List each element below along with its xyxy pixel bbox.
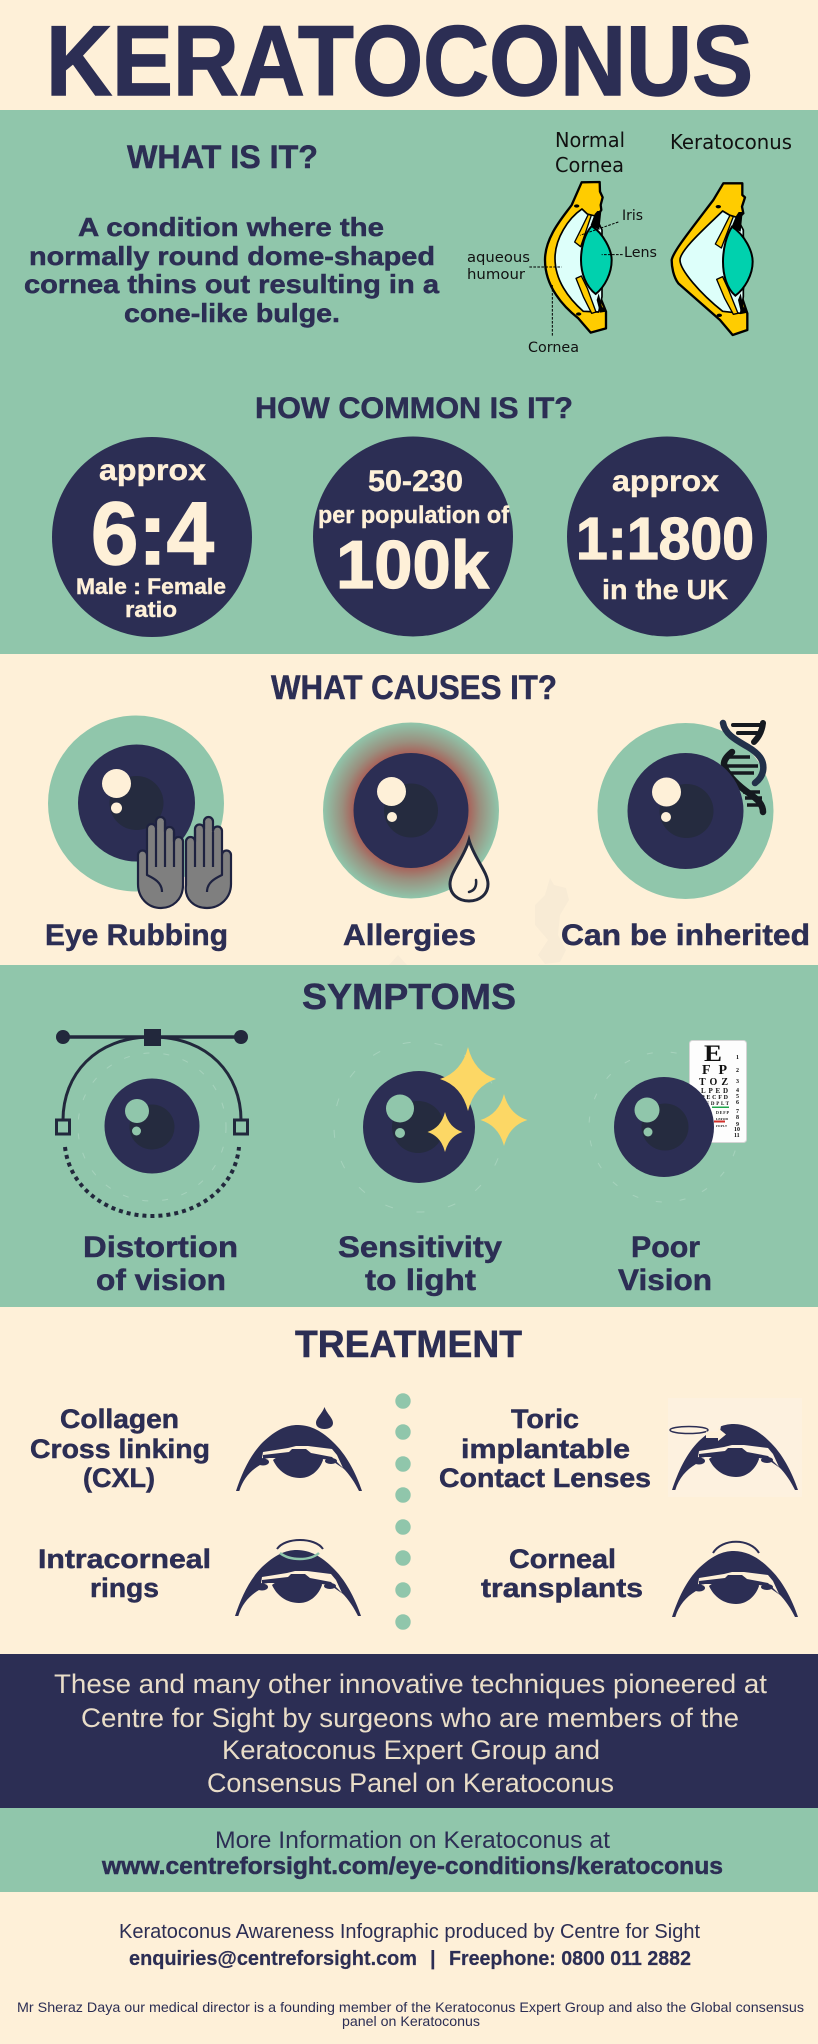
icon: red eye with tear: [323, 722, 499, 901]
eye chart: 11: [734, 1133, 740, 1139]
footer: credits and contact: [119, 1921, 700, 1970]
stat circle: UK prevalence: approx: [612, 465, 719, 498]
eye chart: 7: [736, 1109, 739, 1115]
panel: more information: More Information on Keratoconus at: [215, 1827, 610, 1854]
label: can be inherited: Can be inherited: [561, 919, 810, 952]
stat circle: UK prevalence: [567, 436, 767, 636]
panel: more information: [0, 1808, 818, 1892]
eye chart: 8: [736, 1115, 739, 1121]
footer: credits and contact: Freephone: 0800 011 2882: [449, 1948, 691, 1970]
label: sensitivity to light: Sensitivity: [338, 1231, 502, 1264]
diagram: normal cornea: aqueous: [467, 250, 530, 266]
text: toric implantable contact lenses: implantable: [461, 1434, 630, 1464]
stat circle: male female ratio: Male : Female: [76, 574, 226, 599]
icon: eye with DNA: [598, 723, 774, 899]
icon: cornea with intracorneal ring: [235, 1540, 361, 1616]
diagram: keratoconus cornea: Keratoconus: [670, 130, 792, 154]
icon: eye with sparkles: [334, 1042, 528, 1212]
eye chart: 1: [736, 1055, 739, 1061]
label: poor vision: Poor: [631, 1231, 700, 1264]
diagram: normal cornea: Iris: [622, 208, 643, 224]
title: KERATOCONUS: [46, 5, 753, 116]
footer: medical director note: [17, 1999, 804, 2029]
definition text: cone-like bulge.: [124, 298, 340, 328]
eye chart: 9: [736, 1122, 739, 1128]
panel: pioneered techniques: [0, 1654, 818, 1808]
icon: cornea with drop: [236, 1407, 362, 1491]
text: corneal transplants: Corneal: [509, 1544, 616, 1574]
panel: what is it and how common: [0, 110, 818, 654]
eye chart: LEFOD: [716, 1117, 728, 1121]
diagram: normal cornea: Normal: [555, 128, 625, 152]
heading: treatment: TREATMENT: [295, 1324, 522, 1366]
text: collagen cross linking: Cross linking: [30, 1434, 210, 1464]
diagram: normal cornea: Lens: [624, 245, 657, 261]
footer: credits and contact: |: [430, 1948, 436, 1970]
panel: more information: www.centreforsight.com/eye-conditions/keratoconus: [101, 1853, 723, 1880]
text: collagen cross linking: Collagen: [60, 1404, 179, 1434]
eye chart: FDPLT: [716, 1124, 727, 1128]
panel: pioneered techniques: These and many other innovative techniques pioneered at: [54, 1669, 768, 1699]
eye chart: E: [704, 1041, 722, 1066]
footer: credits and contact: Keratoconus Awareness Infographic produced by Centre for Sight: [119, 1921, 700, 1943]
footer: credits and contact: enquiries@centreforsight.com: [129, 1948, 417, 1970]
label: sensitivity to light: to light: [365, 1264, 476, 1297]
text: intracorneal rings: rings: [90, 1573, 159, 1603]
icon: cornea with implantable lens: [668, 1398, 802, 1497]
eye chart: 3: [736, 1079, 739, 1085]
label: poor vision: [618, 1231, 712, 1297]
heading: what is it: WHAT IS IT?: [127, 139, 318, 175]
label: eye rubbing: Eye Rubbing: [45, 919, 228, 952]
stat circle: male female ratio: ratio: [125, 597, 177, 622]
footer: medical director note: Mr Sheraz Daya our medical director is a founding member of the Keratoconus Expert Group and also the Global consensus: [17, 1999, 804, 2015]
stat circle: per population: 100k: [336, 527, 489, 603]
text: toric implantable contact lenses: Toric: [511, 1404, 579, 1434]
panel: pioneered techniques: Centre for Sight by surgeons who are members of the: [81, 1703, 739, 1733]
panel: pioneered techniques: Consensus Panel on Keratoconus: [207, 1768, 614, 1798]
text: intracorneal rings: [38, 1544, 211, 1603]
definition text: cornea thins out resulting in a: [24, 269, 440, 299]
diagram: normal cornea: humour: [467, 267, 525, 283]
text: collagen cross linking: (CXL): [83, 1463, 155, 1493]
heading: how common is it: HOW COMMON IS IT?: [255, 392, 573, 425]
eye chart: TOZ: [699, 1077, 728, 1088]
eye chart: 2: [736, 1068, 739, 1074]
eye chart: 4: [736, 1088, 739, 1094]
text: intracorneal rings: Intracorneal: [38, 1544, 211, 1574]
heading: symptoms: SYMPTOMS: [302, 976, 516, 1017]
panel: pioneered techniques: Keratoconus Expert Group and: [222, 1735, 600, 1765]
definition text: normally round dome-shaped: [29, 241, 435, 271]
eye chart: 10: [734, 1127, 740, 1133]
text: collagen cross linking: [30, 1404, 210, 1493]
faint map watermark: [389, 878, 569, 965]
heading: what causes it: WHAT CAUSES IT?: [271, 669, 557, 707]
panel: treatment: [30, 1324, 802, 1630]
diagram: normal cornea: Cornea: [555, 153, 624, 177]
eye chart: 6: [736, 1100, 739, 1106]
label: allergies: Allergies: [343, 919, 476, 952]
diagram: normal cornea: Cornea: [528, 340, 579, 356]
icon: eye with bezier distortion: [56, 1029, 248, 1216]
eye chart: DEFP: [716, 1110, 730, 1115]
stat circle: male female ratio: approx: [99, 454, 206, 487]
definition text: A condition where the: [78, 212, 384, 242]
diagram: keratoconus cornea: [670, 130, 792, 335]
stat circle: UK prevalence: 1:1800: [576, 506, 754, 572]
label: sensitivity to light: [338, 1231, 502, 1297]
eye chart: PECFD: [701, 1095, 729, 1101]
stat circle: male female ratio: [52, 437, 252, 637]
icon: cornea with transplant: [672, 1542, 798, 1617]
stat circle: UK prevalence: in the UK: [602, 574, 728, 605]
text: toric implantable contact lenses: [439, 1404, 651, 1493]
text: corneal transplants: [481, 1544, 643, 1603]
eye chart: LPED: [701, 1087, 728, 1095]
diagram: normal cornea: [467, 128, 657, 356]
eye chart: 5: [736, 1094, 739, 1100]
stat circle: per population: per population of: [318, 502, 510, 529]
icon: eye with eye chart: [589, 1040, 746, 1202]
stat circle: per population: 50-230: [368, 465, 463, 498]
eye chart: FDPLT: [706, 1102, 730, 1107]
eye chart: [690, 1040, 746, 1142]
stat circle: male female ratio: 6:4: [91, 483, 214, 583]
panel: symptoms: [0, 965, 818, 1307]
label: distortion of vision: [83, 1231, 238, 1297]
dotted divider: [395, 1393, 411, 1630]
label: distortion of vision: of vision: [96, 1264, 226, 1297]
panel: what causes it: [45, 669, 810, 965]
label: poor vision: Vision: [618, 1264, 712, 1297]
stat circle: per population: [313, 436, 513, 636]
label: distortion of vision: Distortion: [83, 1231, 238, 1264]
definition text: [24, 212, 440, 328]
text: toric implantable contact lenses: Contact Lenses: [439, 1463, 651, 1493]
eye chart: FP: [702, 1063, 727, 1078]
footer: medical director note: panel on Keratoconus: [342, 2013, 480, 2029]
text: corneal transplants: transplants: [481, 1573, 643, 1603]
icon: eye with hands: [48, 716, 231, 908]
